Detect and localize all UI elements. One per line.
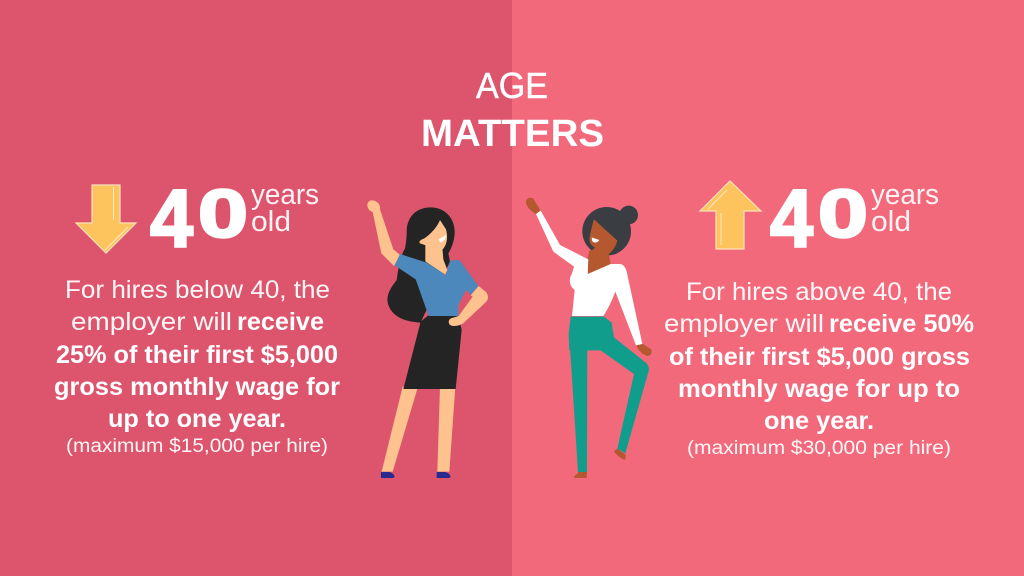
panel: left background [0,0,512,576]
text block: above 40 description: one year. [764,407,874,435]
text block: below 40 description [54,276,340,457]
age label [871,179,939,238]
face [419,220,447,251]
age number: 0 [818,176,868,252]
raised hand [526,198,541,214]
age number: 4 [150,174,193,264]
age label: old [871,206,911,238]
text block: above 40 description: For hires above 40, the [686,278,952,306]
text block: above 40 description: monthly wage for up to [678,375,960,403]
text block: below 40 description: employer will [71,308,232,336]
figure: woman in blue top [367,200,488,478]
age label: old [251,206,291,238]
text block: above 40 description [664,278,974,459]
neck [425,243,447,275]
legs [382,387,455,472]
panel: over 40 [664,174,974,459]
neck and face [587,219,617,274]
age number: 0 [198,176,248,252]
hair [387,207,455,323]
age label: years [871,179,939,211]
left leg [569,337,587,472]
text block: above 40 description: of their first $5,000 gross [669,343,970,371]
age label: years [251,179,319,211]
title: AGE [476,65,548,106]
shoes [381,472,451,478]
text block: below 40 description: gross monthly wage for [54,373,340,401]
hair [582,206,638,256]
text block: below 40 description: (maximum $15,000 per hire) [66,436,328,457]
feet [574,449,626,478]
text block: below 40 description: For hires below 40, the [65,276,330,304]
icon: up arrow [700,181,761,249]
text block: above 40 description: employer will [664,310,824,338]
lower hand [636,343,652,356]
text block: below 40 description: up to one year. [108,405,286,433]
age label [251,179,319,238]
skirt [403,315,462,389]
trousers [569,317,649,453]
title: MATTERS [421,113,604,155]
text block: above 40 description: receive 50% [829,310,974,338]
blouse [395,254,478,316]
text block: below 40 description: receive [237,308,324,336]
panel: right background [512,0,1024,576]
figure: woman in white top [526,198,652,478]
text block: below 40 description: 25% of their first $5,000 [56,341,338,369]
icon: down arrow [76,185,136,253]
white top [536,211,642,345]
age number: 4 [770,174,813,264]
hand on hip arm [449,286,488,326]
panel: under 40 [54,174,340,457]
raised arm [367,200,400,266]
smile [439,235,446,242]
text block: above 40 description: (maximum $30,000 per hire) [687,438,951,459]
title [421,65,604,155]
smile [592,237,599,243]
